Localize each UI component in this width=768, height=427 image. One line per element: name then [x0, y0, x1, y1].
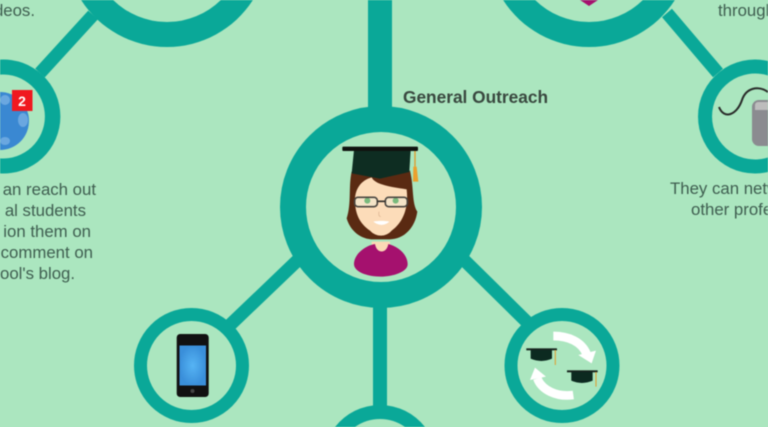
icon: graduate avatar [342, 147, 418, 277]
central ring with graduate avatar [293, 119, 469, 295]
text: left description: ion them on [3, 222, 91, 241]
top left ring [81, 0, 253, 47]
text: left description: al students [5, 201, 86, 220]
right small ring with mouse [698, 59, 768, 173]
text: left description [0, 180, 96, 284]
icon: computer mouse [719, 88, 768, 146]
text: left description: an reach out [3, 180, 96, 199]
icon: smartphone [177, 334, 209, 397]
text: left description: comment on [1, 243, 93, 262]
icon: globe with notification: 2 [18, 93, 26, 109]
text: right description [670, 179, 768, 220]
text: left description: ool's blog. [0, 264, 75, 283]
heading: General Outreach: General Outreach [403, 87, 548, 107]
left small ring with globe [0, 59, 60, 173]
phone ring [140, 314, 242, 416]
bottom ring [335, 405, 425, 427]
icon: rotating caps [526, 336, 598, 395]
top right ring [503, 0, 675, 47]
cycle ring [511, 314, 613, 416]
